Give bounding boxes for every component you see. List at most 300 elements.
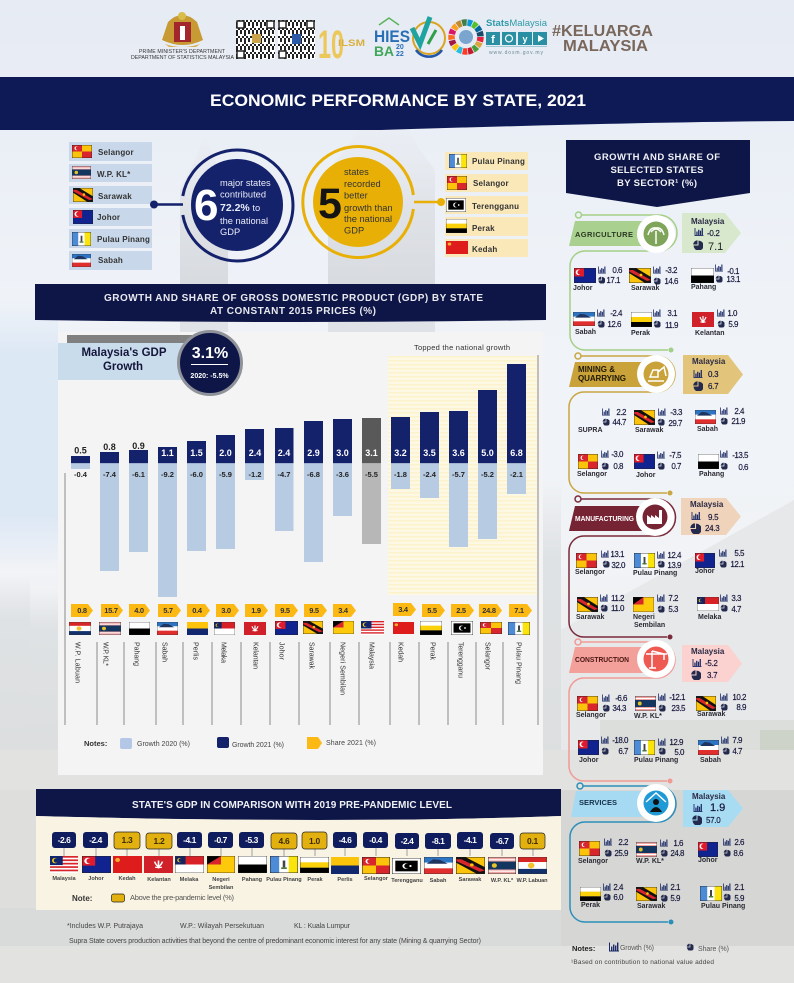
comparison state names: Johor: [88, 876, 105, 882]
Johor: 5.5: [734, 549, 745, 558]
logo: StatsMalaysia social: www.dosm.gov.my: [489, 50, 544, 56]
Malaysia construction: Malaysia: [691, 647, 725, 656]
panel: GDP by state chart: [58, 332, 543, 775]
heading: growth and share by sector: SELECTED STATES: [610, 165, 704, 176]
callout: 6 major states: the national: [220, 216, 268, 226]
bars: Kedah: 3.2: [394, 448, 407, 458]
panel: better growth states list: Terengganu: [472, 202, 519, 211]
sector ribbon: manufacturing: [569, 498, 674, 536]
Malaysia GDP growth badge: [178, 332, 242, 394]
Sabah: 12.6: [607, 320, 622, 329]
SUPRA: 2.2: [616, 408, 627, 417]
chart legend: Growth 2021 (%): [232, 742, 284, 749]
department name: [131, 49, 235, 61]
comparison values: -6.7: [496, 836, 509, 846]
Pulau Pinang: 13.9: [667, 561, 682, 570]
Malaysia mining: 6.7: [708, 382, 719, 391]
Sarawak: 2.1: [670, 883, 681, 892]
logo: StatsMalaysia social: StatsMalaysia: [486, 18, 548, 29]
Johor: 0.6: [612, 266, 623, 275]
callout: 6 major states: contributed: [220, 190, 266, 200]
bars: W.P. Labuan: -0.4: [74, 470, 88, 479]
Pulau Pinang: Pulau Pinang: [701, 903, 745, 910]
panel: manufacturing: [569, 496, 745, 640]
Malaysia manufacturing: 24.3: [705, 524, 720, 533]
callout: 6 major states: 6: [194, 181, 218, 230]
heading: growth and share by sector: BY SECTOR¹ (%): [617, 178, 697, 189]
Perak: 2.4: [613, 883, 624, 892]
Sabah: -2.4: [610, 309, 623, 318]
Johor: Johor: [579, 757, 599, 764]
bars: Pahang: -6.1: [132, 470, 145, 479]
Sarawak: 5.9: [670, 894, 681, 903]
bars: Perlis: -6.0: [190, 470, 203, 479]
SUPRA: SUPRA: [578, 427, 603, 434]
Negeri Sembilan: Negeri: [633, 614, 655, 621]
callout: 5 states better growth: [303, 147, 445, 258]
panel: pre-pandemic comparison: [36, 816, 561, 910]
Johor: [573, 266, 623, 292]
comparison state names: W.P. KL*: [491, 878, 514, 884]
comparison values: 1.0: [309, 836, 321, 846]
heading: pre-pandemic comparison: [36, 789, 561, 820]
bars: W.P. Labuan: [71, 446, 90, 479]
rotated state names: Terengganu: [456, 642, 464, 678]
Johor: -18.0: [612, 736, 629, 745]
Sarawak: 11.0: [611, 604, 625, 613]
comparison values: -2.6: [58, 835, 71, 845]
rotated state names: Kedah: [396, 642, 404, 662]
sector legend: Share (%): [698, 946, 729, 953]
panel: major states list: Johor: [97, 213, 120, 222]
Pulau Pinang: 5.9: [734, 894, 745, 903]
panel: major states list: Pulau Pinang: [97, 235, 150, 244]
panel: major states list: Sarawak: [98, 192, 132, 201]
callout: 5 states better growth: states: [344, 167, 369, 177]
logo: HIES BA 2022: HIES: [374, 27, 410, 46]
Johor: [695, 549, 745, 575]
sector ribbon: construction: CONSTRUCTION: [575, 657, 629, 664]
Sarawak: 29.7: [668, 419, 683, 428]
Sabah: 4.7: [732, 747, 743, 756]
share 2021 tags: [71, 603, 532, 617]
Johor: 2.6: [734, 838, 745, 847]
Malaysia GDP growth label: [58, 335, 192, 380]
bars: Sabah: -9.2: [161, 470, 174, 479]
sector ribbon: mining: QUARRYING: [578, 374, 626, 383]
rotated state names: Kelantan: [252, 642, 258, 669]
footnotes: KL : Kuala Lumpur: [294, 923, 351, 930]
rotated state names: Melaka: [220, 642, 226, 663]
header logos: [131, 12, 653, 67]
Pulau Pinang: 2.1: [734, 883, 745, 892]
chart legend: [84, 737, 376, 749]
share 2021 tags: 2.5: [456, 606, 466, 615]
rotated state names: Malaysia: [368, 642, 374, 669]
Malaysia construction: 3.7: [707, 671, 718, 680]
comparison state names: Malaysia: [52, 876, 77, 882]
Malaysia GDP growth label: Malaysia's GDP: [82, 347, 167, 359]
comparison values: -4.6: [339, 835, 352, 845]
comparison values: 0.1: [527, 836, 539, 846]
department name: DEPARTMENT OF STATISTICS MALAYSIA: [131, 55, 235, 61]
comparison values: 4.6: [279, 836, 290, 846]
Pulau Pinang: 12.9: [669, 738, 684, 747]
W.P. KL: -12.1: [669, 693, 686, 702]
Sarawak: 10.2: [732, 693, 747, 702]
comparison state names: Sembilan: [209, 885, 234, 891]
heading: pre-pandemic comparison: STATE'S GDP IN COMPARISON WITH 2019 PRE-PANDEMIC LEVEL: [132, 800, 452, 811]
bars: Malaysia: -5.5: [365, 470, 378, 479]
Sarawak: 11.2: [611, 594, 625, 603]
Malaysia agriculture: Malaysia: [691, 217, 725, 226]
bars: Terengganu: 3.6: [452, 448, 465, 458]
rotated state names: Sabah: [160, 642, 168, 662]
Sabah: Sabah: [697, 426, 718, 433]
Sarawak: -3.3: [670, 408, 683, 417]
bars: Sabah: [158, 447, 177, 597]
panel: mining and quarrying: [569, 353, 749, 496]
comparison legend: Note:: [72, 894, 92, 903]
Pahang: -13.5: [732, 451, 749, 460]
Pulau Pinang: 12.4: [667, 551, 682, 560]
Pahang: 13.1: [726, 275, 741, 284]
bars: Kelantan: [245, 429, 264, 480]
Johor: 6.7: [618, 747, 629, 756]
panel: better growth states list: [445, 152, 528, 257]
comparison values: -5.3: [245, 835, 259, 845]
Malaysia construction: [682, 645, 742, 682]
bars: Kelantan: 2.4: [249, 448, 261, 458]
SUPRA: [578, 408, 627, 434]
Negeri Sembilan: 7.2: [668, 594, 679, 603]
Malaysia mining: 0.3: [708, 370, 719, 379]
bars: W.P. KL: 0.8: [103, 442, 116, 452]
Melaka: [697, 594, 742, 621]
Malaysia agriculture: -0.2: [707, 229, 720, 238]
Malaysia services: Malaysia: [692, 792, 726, 801]
Sabah: [698, 736, 743, 764]
rotated state names: Pahang: [132, 642, 140, 666]
comparison flags: [50, 856, 547, 874]
callout: 5 states better growth: the national: [344, 214, 392, 224]
Pahang: -0.1: [727, 267, 740, 276]
Malaysia construction: -5.2: [705, 659, 718, 668]
rotated state names: Negeri Sembilan: [338, 642, 346, 695]
Sabah: [573, 309, 623, 336]
logo: 10 years ILMM: ILSM: [338, 38, 365, 48]
Malaysia GDP growth badge: 2020: -5.5%: [190, 373, 229, 380]
comparison legend: Above the pre-pandemic level (%): [130, 893, 234, 902]
heading: growth and share by sector: [566, 140, 750, 207]
share 2021 tags: 3.4: [398, 605, 409, 614]
Sarawak: [576, 594, 625, 621]
Johor: 0.7: [671, 462, 682, 471]
bars: Negeri Sembilan: -3.6: [336, 470, 349, 479]
logo: SDG wheel: [452, 22, 480, 52]
Selangor: -3.0: [611, 450, 624, 459]
bars: Sarawak: [304, 421, 323, 562]
comparison values: -0.4: [369, 835, 383, 845]
Perak: Perak: [631, 330, 650, 337]
callout: 6 major states: 72.2% to: [220, 202, 260, 214]
Johor: Johor: [636, 472, 656, 479]
Selangor: 2.2: [618, 838, 629, 847]
Negeri Sembilan: 5.3: [668, 605, 679, 614]
title banner: [0, 77, 794, 130]
comparison values: -0.7: [214, 835, 228, 845]
Kelantan: 1.0: [727, 309, 738, 318]
Selangor: 25.9: [614, 849, 629, 858]
bars: Pahang: [129, 441, 148, 552]
W.P. KL: W.P. KL*: [634, 713, 662, 720]
comparison values: -2.4: [89, 835, 103, 845]
panel: construction: [569, 639, 747, 784]
comparison state names: Sabah: [430, 878, 447, 884]
Sarawak: [634, 408, 683, 434]
Sarawak: 14.6: [664, 277, 679, 286]
Malaysia agriculture: [682, 213, 741, 253]
share 2021 tags: 0.4: [192, 606, 203, 615]
Malaysia services: 1.9: [710, 802, 725, 814]
comparison legend: [72, 893, 234, 903]
bars: Johor: -4.7: [278, 470, 290, 479]
bars: Kelantan: -1.2: [249, 470, 261, 479]
Selangor: [578, 838, 629, 865]
Malaysia GDP growth label: Growth: [103, 361, 143, 373]
sector legend: Growth (%): [620, 945, 654, 952]
Malaysia manufacturing: 9.5: [708, 513, 719, 522]
logo: HIES BA 2022: 20: [396, 44, 404, 51]
Selangor: [575, 550, 626, 576]
Kelantan: 5.9: [728, 320, 739, 329]
bars: W.P. KL: -7.4: [103, 470, 117, 479]
topped the national growth highlight: [388, 343, 537, 595]
comparison state names: Pulau Pinang: [266, 877, 302, 883]
bars: W.P. Labuan: 0.5: [74, 446, 87, 456]
Sarawak: Sarawak: [637, 903, 666, 910]
bars: Sarawak: 2.9: [307, 448, 320, 458]
Selangor: Selangor: [575, 569, 605, 576]
bars: Negeri Sembilan: 3.0: [336, 448, 349, 458]
Perak: 3.1: [667, 309, 678, 318]
Johor: [634, 451, 682, 479]
logo: census tick: [412, 17, 445, 57]
share 2021 tags: 15.7: [104, 606, 118, 615]
chart legend: Share 2021 (%): [326, 740, 376, 747]
Malaysia mining: [683, 355, 743, 394]
bars: Perak: -2.4: [423, 470, 437, 479]
Sarawak: Sarawak: [576, 614, 605, 621]
comparison values: [52, 832, 545, 849]
comparison state names: Kelantan: [147, 877, 171, 883]
Selangor: 0.8: [613, 462, 624, 471]
Pahang: 0.6: [738, 463, 749, 472]
panel: major states list: Sabah: [98, 256, 123, 265]
sector ribbon: agriculture: AGRICULTURE: [575, 230, 633, 239]
Johor: 8.6: [733, 849, 744, 858]
Johor: 12.1: [730, 560, 745, 569]
logo: HIES BA 2022: 22: [396, 51, 404, 58]
comparison state names: Selangor: [364, 876, 389, 882]
Sarawak: [696, 693, 747, 718]
Pulau Pinang: 5.0: [674, 748, 685, 757]
Malaysia agriculture: 7.1: [708, 241, 723, 253]
logo: StatsMalaysia social: f: [491, 34, 495, 46]
heading: GDP by state: GROWTH AND SHARE OF GROSS DOMESTIC PRODUCT (GDP) BY STATE: [104, 293, 483, 304]
hashtag: Keluarga Malaysia: [552, 23, 653, 55]
sector ribbon: construction: [569, 640, 675, 678]
Pahang: Pahang: [691, 284, 716, 291]
Melaka: 4.7: [731, 605, 742, 614]
comparison values: -4.1: [183, 835, 197, 845]
bars: Perlis: [187, 441, 206, 551]
W.P. KL: 23.5: [671, 704, 686, 713]
Pahang: [698, 450, 749, 478]
comparison values: -8.1: [432, 836, 445, 846]
hashtag: Keluarga Malaysia: #KELUARGA: [552, 23, 653, 40]
Sarawak: 8.9: [736, 703, 747, 712]
comparison state names: Perlis: [337, 877, 353, 883]
Melaka: Melaka: [698, 614, 721, 621]
Perak: Perak: [581, 902, 600, 909]
panel: better growth states list: Kedah: [472, 245, 497, 254]
Perak: 6.0: [613, 893, 624, 902]
bars: Melaka: 2.0: [219, 448, 232, 458]
bars: Johor: 2.4: [278, 448, 290, 458]
panel: better growth states list: Pulau Pinang: [472, 157, 525, 166]
comparison state names: Perak: [307, 877, 324, 883]
Malaysia mining: Malaysia: [692, 357, 726, 366]
share 2021 tags: 9.5: [309, 606, 319, 615]
bars: Negeri Sembilan: [333, 419, 352, 516]
bars: Selangor: -5.2: [481, 470, 494, 479]
bars: Pulau Pinang: [507, 364, 526, 494]
sector ribbon: mining: MINING &: [578, 365, 615, 374]
share 2021 tags: 4.0: [134, 606, 144, 615]
Sabah: Sabah: [575, 329, 596, 336]
Selangor: 34.3: [612, 704, 627, 713]
comparison state names: Sarawak: [459, 877, 482, 883]
callout: 5 states better growth: growth than: [344, 203, 393, 213]
comparison values: 1.2: [154, 836, 165, 846]
sector ribbon: manufacturing: MANUFACTURING: [575, 516, 635, 523]
sector legend: Notes:: [572, 944, 595, 953]
comparison state names: [52, 876, 548, 891]
Pulau Pinang: [700, 883, 745, 910]
Negeri Sembilan: [633, 594, 679, 629]
Selangor: -6.6: [615, 694, 628, 703]
bars: Perak: [420, 412, 439, 498]
logo: HIES BA 2022: [374, 18, 410, 59]
footnotes: W.P.: Wilayah Persekutuan: [180, 923, 264, 930]
Pahang: [691, 264, 741, 291]
bars: Pulau Pinang: 6.8: [510, 448, 523, 458]
Johor: 17.1: [606, 276, 621, 285]
Negeri Sembilan: Sembilan: [634, 622, 665, 629]
W.P. KL: [634, 693, 686, 720]
Kelantan: [692, 309, 739, 337]
Selangor: [577, 450, 624, 478]
panel: major states list: [69, 142, 152, 270]
Sabah: 21.9: [731, 417, 746, 426]
logo: StatsMalaysia social: [486, 18, 548, 56]
W.P. KL: [636, 839, 685, 865]
share 2021 tags: 5.7: [163, 606, 173, 615]
sector ribbon: agriculture: [569, 215, 675, 253]
Kelantan: Kelantan: [695, 330, 725, 337]
bars: Terengganu: -5.7: [452, 470, 465, 479]
bars: Pulau Pinang: -2.1: [510, 470, 523, 479]
W.P. KL: 1.6: [673, 839, 684, 848]
rotated state names: Pulau Pinang: [514, 642, 522, 684]
panel: services: [570, 783, 745, 924]
comparison values: -4.1: [464, 835, 477, 845]
sector legend: [571, 942, 729, 966]
topped the national growth highlight: Topped the national growth: [414, 343, 510, 352]
comparison values: 1.3: [122, 835, 133, 845]
state flags row: [69, 621, 530, 635]
logo: HIES BA 2022: BA: [374, 43, 394, 59]
callout: 6 major states: GDP: [220, 227, 240, 237]
chart legend: Notes:: [84, 739, 107, 748]
Johor: Johor: [573, 285, 593, 292]
heading: GDP by state: AT CONSTANT 2015 PRICES (%): [210, 306, 376, 317]
QR codes: [236, 20, 315, 59]
callout: 5 states better growth: 5: [318, 180, 342, 228]
bars: Perlis: 1.5: [190, 448, 203, 458]
Perak: [580, 883, 624, 909]
title banner: ECONOMIC PERFORMANCE BY STATE, 2021: [210, 91, 586, 110]
Malaysia manufacturing: [681, 498, 741, 535]
Sarawak: Sarawak: [635, 427, 664, 434]
Selangor: 13.1: [610, 550, 625, 559]
comparison state names: Pahang: [242, 877, 263, 883]
Malaysia services: 57.0: [706, 816, 721, 825]
Sabah: 2.4: [734, 407, 745, 416]
Pulau Pinang: [633, 551, 682, 577]
heading: growth and share by sector: GROWTH AND SHARE OF: [594, 152, 720, 163]
panel: major states list: W.P. KL*: [97, 170, 131, 179]
Johor: -7.5: [669, 451, 682, 460]
Malaysia GDP growth badge: 3.1%: [192, 345, 228, 362]
SUPRA: 44.7: [612, 418, 627, 427]
share 2021 tags: 3.0: [221, 606, 231, 615]
rotated state names: Selangor: [484, 642, 490, 671]
share 2021 tags: 3.4: [338, 606, 349, 615]
share 2021 tags: 5.5: [427, 606, 437, 615]
bars: Malaysia: [362, 418, 381, 544]
panel: better growth states list: Selangor: [473, 179, 509, 188]
Johor: Johor: [695, 568, 715, 575]
Selangor: Selangor: [577, 471, 607, 478]
bars: Malaysia: 3.1: [365, 448, 378, 458]
Pulau Pinang: [634, 738, 685, 764]
share 2021 tags: 1.9: [251, 606, 261, 615]
Sarawak: Sarawak: [697, 711, 726, 718]
Johor: Johor: [698, 857, 718, 864]
Sabah: [695, 407, 746, 433]
bars: Pahang: 0.9: [132, 441, 145, 451]
rotated state names: Perlis: [192, 642, 198, 660]
share 2021 tags: 24.8: [482, 606, 496, 615]
comparison state names: W.P. Labuan: [516, 878, 548, 884]
Johor: [698, 838, 745, 864]
bars: Melaka: -5.9: [219, 470, 232, 479]
bars: Kedah: -1.8: [394, 470, 407, 479]
Perak: 11.9: [665, 321, 679, 330]
rotated state names: W.P. Labuan: [74, 642, 80, 683]
